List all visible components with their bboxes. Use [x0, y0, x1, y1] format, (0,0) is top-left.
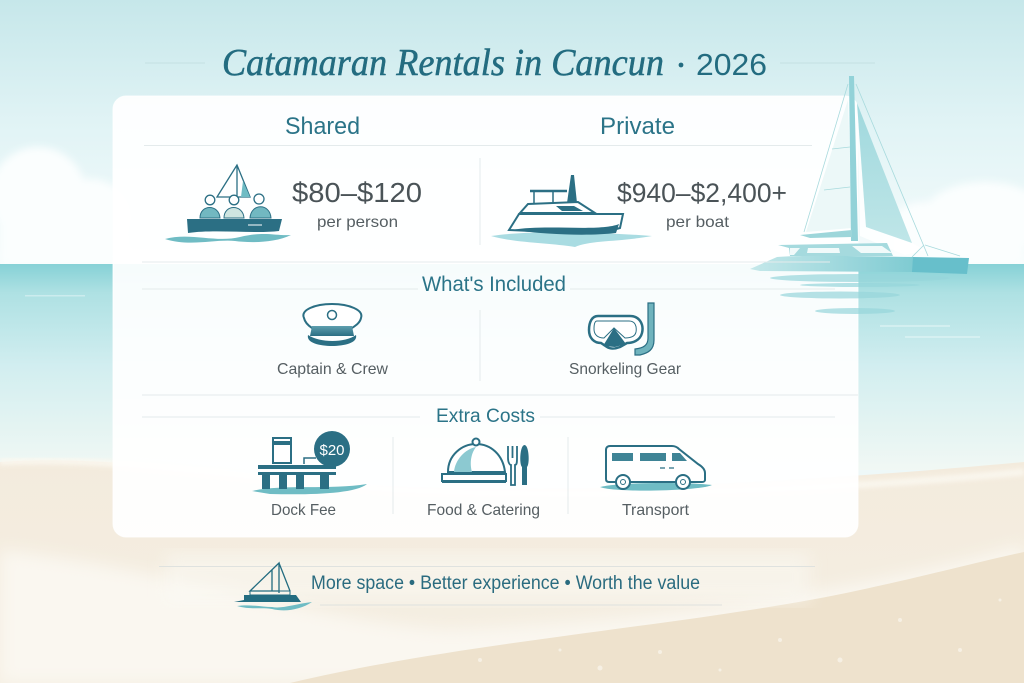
footer banner	[159, 553, 815, 610]
background: sky	[0, 0, 1024, 266]
background: clouds	[0, 147, 1024, 265]
price note: per person: per person	[317, 214, 398, 231]
label: Dock Fee: Dock Fee	[271, 502, 336, 519]
icon: food and catering	[442, 438, 529, 485]
title: 2026	[696, 47, 767, 82]
icon: transport van	[600, 446, 712, 491]
label: Food & Catering: Food & Catering	[427, 502, 540, 519]
label: Transport: Transport	[622, 502, 690, 519]
main panel	[113, 96, 858, 537]
catamaran illustration	[750, 76, 969, 314]
icon: small sailboat	[234, 563, 312, 610]
column heading: Private: Private	[600, 113, 675, 140]
background: water highlights	[25, 295, 980, 338]
icon: dock fee	[252, 431, 367, 494]
price note: per boat: per boat	[666, 214, 730, 231]
background: beach	[0, 460, 1024, 683]
tagline: More space • Better experience • Worth the value	[311, 573, 700, 594]
heading: Extra Costs: Extra Costs	[436, 406, 535, 427]
title	[145, 42, 875, 84]
background: sea	[0, 264, 1024, 470]
price: private: $940–$2,400+	[617, 178, 787, 208]
label: Snorkeling Gear: Snorkeling Gear	[569, 361, 682, 378]
price: shared: $80–$120	[292, 177, 422, 208]
icon: snorkel mask	[589, 303, 654, 355]
title: Catamaran Rentals in Cancun	[222, 42, 664, 84]
label: Captain & Crew: Captain & Crew	[277, 361, 388, 378]
icon: shared boat with passengers	[165, 165, 291, 243]
column heading: Shared: Shared	[285, 113, 360, 140]
heading: What's Included: What's Included	[422, 273, 566, 296]
icon: captain hat	[303, 304, 361, 346]
icon: dock fee: $20	[319, 442, 345, 459]
divider lines	[142, 146, 858, 514]
icon: private motor yacht	[491, 175, 652, 247]
